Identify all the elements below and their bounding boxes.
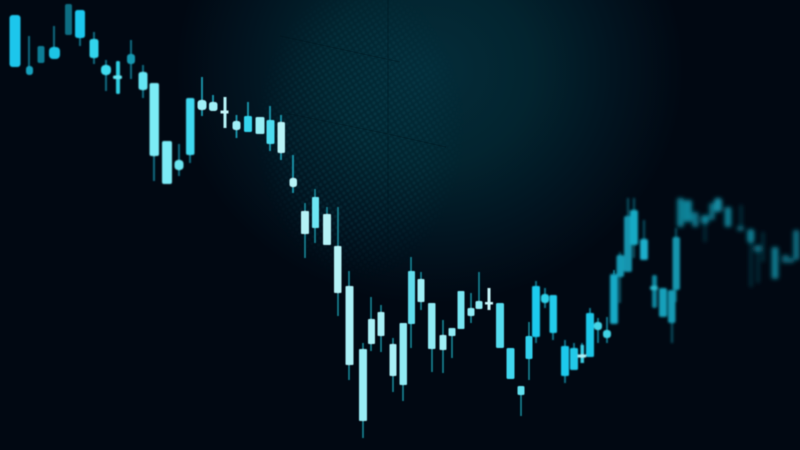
candles: sharp central drop, in focus: [301, 189, 407, 438]
candles: recovery section, slightly blurred: [532, 270, 614, 383]
candles: far right plateau, heavily blurred: [677, 198, 800, 287]
candles: top-left descending section, blurred: [10, 4, 194, 184]
candles: bottom consolidation section, in focus: [408, 257, 532, 416]
candles: upper shoulder section: [198, 77, 297, 193]
background: [210, 0, 649, 272]
candles: far right rising section, out of focus: [610, 198, 680, 343]
